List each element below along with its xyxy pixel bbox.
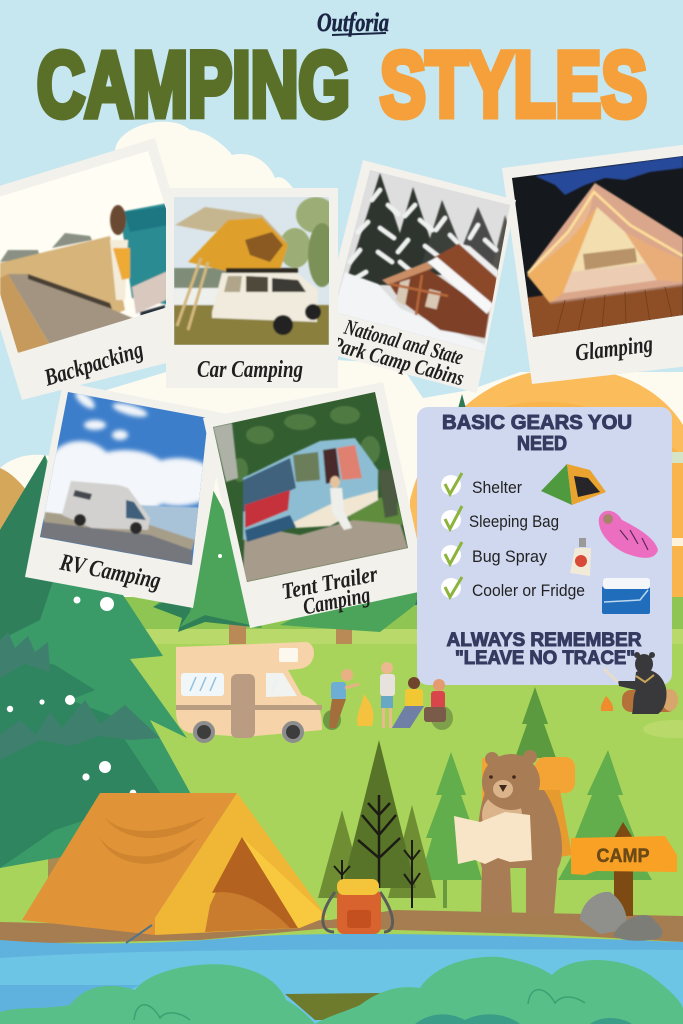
tent door: [205, 837, 298, 932]
grass band darker: [0, 597, 683, 629]
bear eyes: [489, 775, 516, 779]
caption: Car Camping: [197, 357, 303, 383]
rv skylight: [279, 648, 298, 662]
logo: [317, 8, 389, 37]
item: bug spray: Bug Spray: [472, 547, 547, 566]
photo: rv under blue sky: [40, 392, 206, 565]
polaroid: backpacking: [0, 138, 170, 400]
tent door flap: [242, 837, 327, 928]
camper 3: [392, 677, 424, 728]
water lower: [0, 949, 683, 1024]
clearing: [285, 993, 388, 1020]
camper 1: [329, 669, 359, 728]
caption line 2: Camping: [301, 582, 372, 619]
polaroid: rv camping: [25, 382, 227, 608]
panel background: [417, 407, 672, 685]
ground: dirt bank: [0, 910, 683, 944]
camper 4: [424, 679, 446, 722]
small rock: [613, 915, 662, 941]
pack body: [337, 890, 381, 934]
left bush: [0, 964, 315, 1024]
panel: basic gears: [417, 407, 672, 685]
backpack: [323, 879, 393, 934]
tree: dark green behind bear: [515, 687, 556, 758]
bear chest mark: [636, 675, 654, 682]
photo: backpacker on boardwalk: [0, 151, 166, 353]
post: [614, 822, 633, 916]
tent peg: [126, 925, 152, 943]
tree: behind panel: [404, 394, 520, 605]
tent front: [22, 793, 237, 935]
rv window streaks: [190, 677, 278, 691]
title word: camping: CAMPING: [37, 34, 350, 136]
caption line 1: Tent Trailer: [280, 561, 380, 604]
tree: behind polaroids left: [153, 488, 262, 644]
rv body: [176, 642, 322, 737]
tent side: [155, 793, 327, 935]
caption line 1: National and State: [341, 314, 466, 370]
olive tree trio: [318, 740, 436, 908]
tree: green left of bear: [420, 752, 482, 908]
bird mark left: [134, 1005, 190, 1020]
polaroid: tent trailer: [203, 382, 428, 628]
tree: green right of bear: [558, 750, 652, 880]
title: [37, 34, 647, 136]
hill band right cream: [665, 538, 683, 546]
frame: [0, 138, 217, 400]
centre tree: [342, 740, 416, 888]
snow dabs on trees: [350, 190, 496, 278]
frame: [203, 382, 428, 628]
rv left window: [181, 673, 224, 696]
campers around fire: [323, 662, 453, 730]
sign text: CAMP: [596, 846, 650, 867]
cloud: lower cream field: [0, 360, 683, 620]
frame: [166, 188, 338, 388]
grass: [0, 597, 683, 957]
frame: [315, 160, 516, 393]
water upper: [0, 934, 683, 1024]
right bush: [315, 957, 683, 1024]
bear head: [634, 652, 655, 674]
remember line 1: ALWAYS REMEMBER: [446, 630, 642, 651]
hill: orange: [410, 368, 683, 620]
bear backpack: [482, 758, 500, 815]
tent door dark: [212, 837, 298, 928]
bear body: [618, 670, 667, 714]
fire: [357, 694, 374, 726]
dark bush humps: [415, 1014, 632, 1024]
marshmallow stick: [604, 669, 618, 682]
log: [622, 689, 678, 712]
large rock: [580, 892, 627, 934]
frame: [25, 382, 227, 608]
deck planks: [556, 287, 673, 335]
item: sleeping bag: [441, 506, 559, 531]
bear head: [482, 754, 540, 810]
grass highlight: [643, 720, 683, 738]
big pine tree left: [0, 455, 192, 880]
frame: [502, 144, 683, 384]
map: [454, 812, 532, 864]
bear bedroll: [535, 757, 575, 793]
board: [571, 836, 677, 875]
polaroid: cabins: [338, 160, 516, 393]
shrub left: [323, 710, 341, 730]
caption: Glamping: [574, 331, 654, 367]
hill band right: [665, 452, 683, 463]
caption: Backpacking: [41, 337, 147, 392]
bear belly: [482, 793, 522, 837]
tree: behind polaroids right: [280, 590, 420, 644]
remember line 2: "LEAVE NO TRACE": [455, 648, 635, 669]
grass band lighter: [0, 629, 683, 644]
item: sleeping bag: Sleeping Bag: [469, 512, 559, 531]
hill: tan left: [0, 468, 26, 530]
water: [0, 934, 683, 1024]
bear legs: [481, 862, 558, 914]
panel heading line 2: NEED: [517, 433, 567, 455]
water lower-left shade: [0, 985, 140, 1020]
rv stripe: [176, 705, 322, 710]
logo word: Outforia: [317, 8, 389, 37]
photo: roof tent on car: [174, 197, 336, 345]
rv right window: [266, 673, 297, 697]
polaroid: car camping: [166, 188, 338, 388]
item: cooler or fridge: Cooler or Fridge: [472, 581, 585, 600]
left tree: [318, 810, 366, 898]
rv wheels: [195, 723, 302, 741]
bedroll: [337, 879, 379, 895]
tree snow dot: [218, 554, 222, 558]
logo underline: [332, 33, 386, 35]
icon: bug spray: [570, 538, 591, 576]
camper 2: [380, 662, 395, 728]
caption line 2: Park Camp Cabins: [328, 331, 467, 390]
item: shelter: Shelter: [472, 478, 522, 497]
photo: vintage trailer: [205, 390, 415, 585]
photo: snowy cabin: [338, 170, 510, 352]
tent: [22, 793, 327, 943]
motorhome: [176, 642, 322, 741]
cloud: upper: [115, 122, 320, 240]
icon: cooler: [602, 578, 650, 614]
polaroid: glamping: [502, 144, 683, 384]
rocks: [580, 892, 662, 941]
item: bug spray: [441, 542, 547, 566]
right tree: [388, 805, 436, 898]
caption: RV Camping: [57, 549, 163, 595]
hill: orange inner: [470, 402, 683, 610]
tent fold marks: [100, 817, 205, 864]
black bear with marshmallow: [604, 652, 678, 714]
panel heading line 1: BASIC GEARS YOU: [442, 412, 632, 434]
bear with map: [454, 750, 575, 914]
branches: [334, 795, 420, 908]
foreground bushes: [0, 957, 683, 1024]
bear muzzle: [493, 780, 513, 798]
shrub right: [431, 706, 453, 730]
bird mark right: [528, 990, 585, 1004]
bear body: [478, 790, 562, 868]
item: shelter: [441, 473, 522, 497]
rv door: [231, 674, 255, 738]
item: cooler or fridge: [441, 577, 585, 600]
small fire: [601, 696, 613, 711]
straps: [323, 892, 393, 932]
bear nose: [499, 785, 507, 792]
bear pack body: [530, 790, 572, 860]
sign: camp: [571, 822, 677, 916]
bear ears: [485, 750, 537, 766]
photo: bell tent at night: [505, 150, 683, 340]
icon: sleeping bag: [599, 511, 658, 558]
icon: tent: [541, 464, 606, 505]
pocket: [347, 910, 371, 928]
